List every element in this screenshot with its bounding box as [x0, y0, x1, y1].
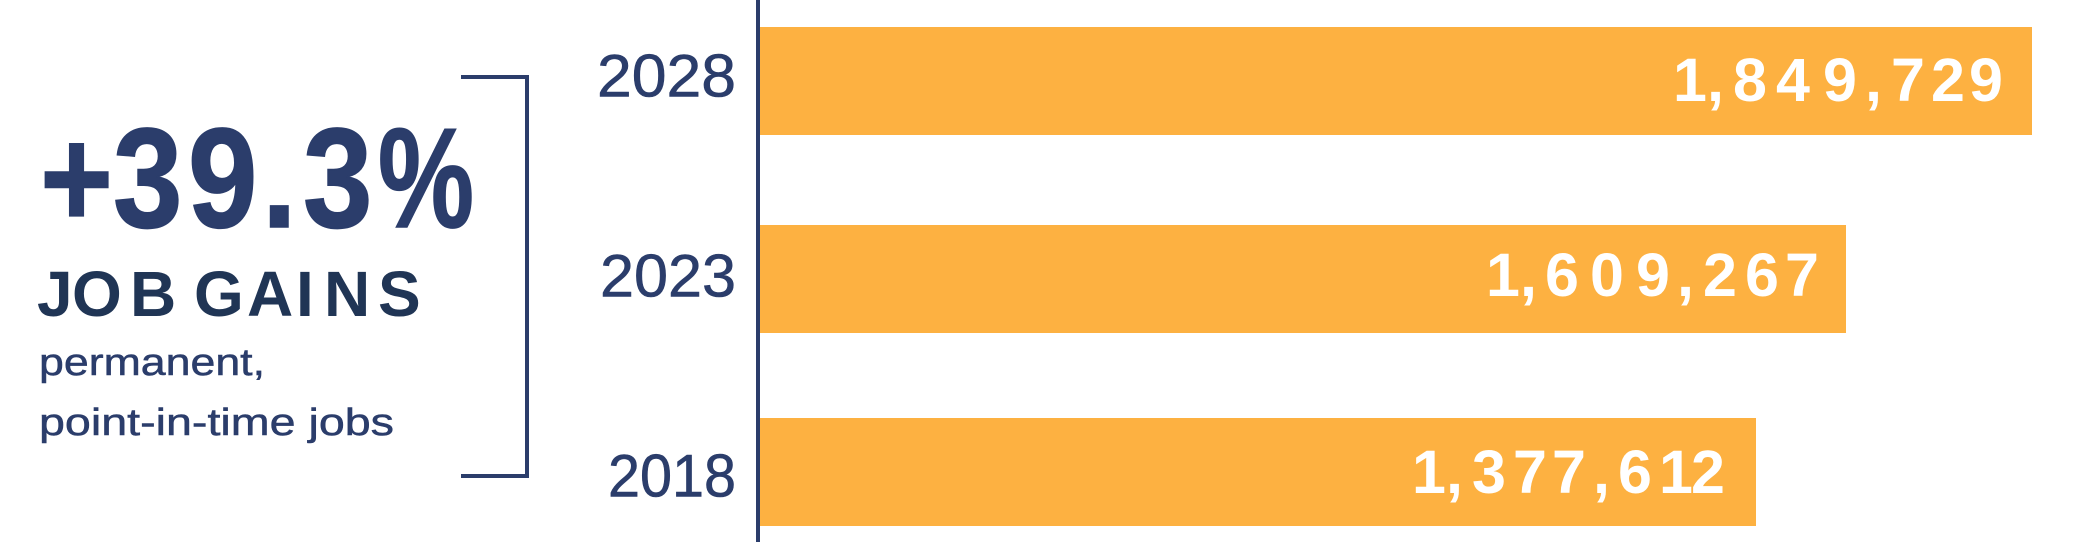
description line 1: permanent, [39, 342, 265, 384]
panel: job gains summary [0, 99, 474, 444]
value: 2023: 1,609,267 [1486, 241, 1819, 309]
axis line [756, 0, 760, 542]
label: 2018: 2018 [608, 442, 736, 510]
label: 2023: 2023 [600, 242, 736, 310]
bar chart [597, 0, 2032, 542]
bar: 2028 [760, 27, 2032, 135]
value: 2028: 1,849,729 [1673, 46, 2003, 114]
bracket [461, 77, 527, 476]
headline: +39.3%: % [378, 99, 474, 258]
label: 2028: 2028 [597, 42, 736, 110]
headline: +39.3%: +39.3 [40, 100, 372, 258]
value: 2018: 1,377,612 [1412, 438, 1725, 506]
bar: 2023 [760, 225, 1846, 333]
bar: 2018 [760, 418, 1756, 526]
description line 2: point-in-time jobs [39, 402, 394, 444]
subheading: JOB GAINS: JOB GAINS [0, 258, 421, 330]
